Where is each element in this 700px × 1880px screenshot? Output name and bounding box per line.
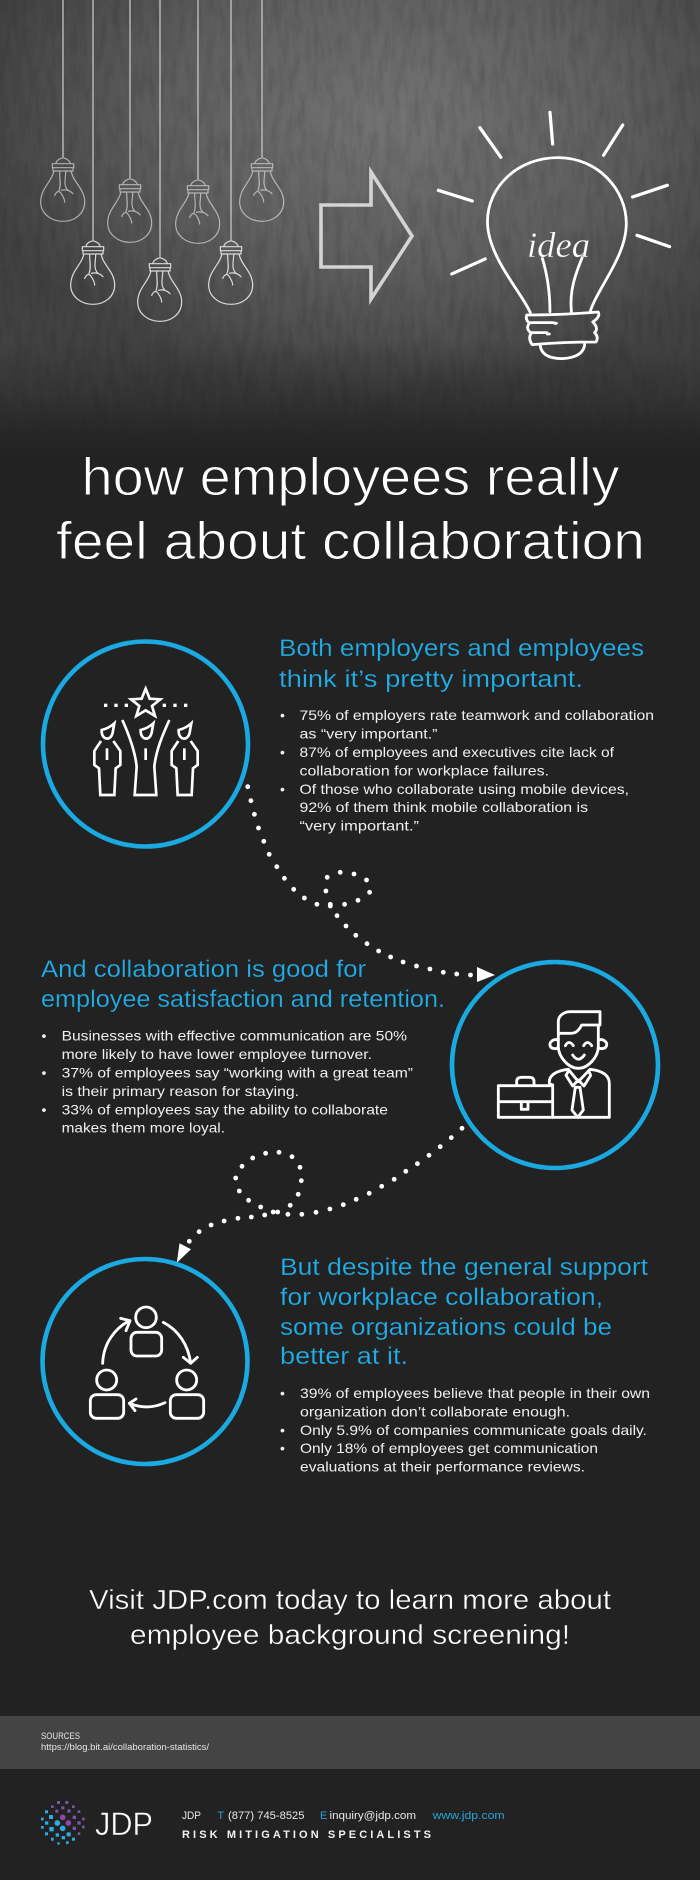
contact line: inquiry@jdp.com: [330, 1810, 416, 1822]
bullets: section 2: •: [42, 1064, 46, 1080]
logo wordmark: JDP: [95, 1806, 153, 1842]
title: how employees really: [82, 448, 620, 507]
bullets: section 2: 33% of employees say the ability to collaborate: [62, 1101, 388, 1117]
bullets: section 3: Only 18% of employees get communication: [300, 1440, 598, 1456]
bullets: section 3: [280, 1385, 650, 1475]
bullets: section 1: Of those who collaborate using mobile devices,: [300, 781, 629, 797]
big idea bulb: [438, 112, 670, 359]
panel: sources band: [0, 1716, 700, 1769]
icon: three people cycle: [90, 1307, 204, 1418]
call to action: Visit JDP.com today to learn more about: [89, 1584, 611, 1615]
heading: section 2: [41, 956, 445, 1013]
panel: sources band: https://blog.bit.ai/collaboration-statistics/: [41, 1742, 209, 1753]
bullets: section 3: Only 5.9% of companies communicate goals daily.: [300, 1422, 647, 1438]
logo: JDP dot burst: [41, 1801, 85, 1845]
bullets: section 2: Businesses with effective communication are 50%: [62, 1028, 407, 1044]
heading: section 2: employee satisfaction and retention.: [41, 986, 445, 1013]
title: [56, 448, 645, 571]
call to action: employee background screening!: [130, 1619, 570, 1650]
bullets: section 1: 75% of employers rate teamwork and collaboration: [300, 707, 654, 723]
bullets: section 3: •: [280, 1385, 285, 1401]
header: chalkboard illustration: [0, 0, 700, 460]
heading: section 3: [280, 1254, 648, 1370]
icon: team with star: [94, 689, 198, 795]
dotted arrow 1: [245, 784, 495, 982]
panel: section 1 text: [279, 635, 654, 834]
heading: section 3: But despite the general support: [280, 1254, 648, 1281]
bullets: section 2: makes them more loyal.: [62, 1120, 225, 1136]
bullets: section 2: [42, 1028, 413, 1136]
panel: section 2 text: [41, 956, 445, 1136]
contact line: JDP: [182, 1810, 201, 1822]
arrow: [321, 172, 412, 299]
bullets: section 3: organization don’t collaborate enough.: [300, 1404, 570, 1420]
panel: section 1 icon circle: [43, 642, 248, 846]
heading: section 2: And collaboration is good for: [41, 956, 366, 983]
title: feel about collaboration: [56, 512, 645, 571]
bullets: section 3: 39% of employees believe that people in their own: [300, 1385, 650, 1401]
heading: section 1: Both employers and employees: [279, 635, 644, 662]
bullets: section 3: •: [280, 1422, 285, 1438]
panel: section 3 text: [280, 1254, 650, 1475]
heading: section 3: for workplace collaboration,: [280, 1284, 603, 1311]
dotted arrow 2: [177, 1126, 464, 1263]
contact line: www.jdp.com: [431, 1810, 505, 1822]
panel: section 2 icon circle: [452, 962, 658, 1168]
heading: section 1: [279, 635, 644, 693]
icon: smiling employee with briefcase: [498, 1012, 609, 1117]
call to action: [89, 1584, 611, 1650]
bullets: section 3: •: [280, 1440, 285, 1456]
bullets: section 1: “very important.”: [300, 818, 419, 834]
big idea bulb: idea: [527, 225, 590, 265]
bullets: section 2: more likely to have lower employee turnover.: [62, 1046, 372, 1062]
bullets: section 1: 87% of employees and executives cite lack of: [300, 744, 614, 760]
contact line: [182, 1810, 505, 1822]
heading: section 3: some organizations could be: [280, 1314, 612, 1341]
heading: section 1: think it’s pretty important.: [279, 666, 583, 693]
hanging bulbs group: [41, 0, 284, 321]
bullets: section 1: •: [280, 744, 285, 760]
bullets: section 1: [280, 707, 654, 834]
bullets: section 2: is their primary reason for staying.: [62, 1083, 299, 1099]
bullets: section 2: 37% of employees say “working with a great team”: [62, 1064, 413, 1080]
contact line: T: [217, 1810, 224, 1822]
contact line: E: [320, 1810, 327, 1822]
bullets: section 1: •: [280, 707, 285, 723]
panel: section 3 icon circle: [42, 1259, 248, 1464]
footer: [41, 1801, 505, 1845]
bullets: section 1: as “very important.”: [300, 726, 438, 742]
panel: sources band: SOURCES: [41, 1731, 80, 1742]
bullets: section 1: 92% of them think mobile collaboration is: [300, 799, 588, 815]
bullets: section 1: collaboration for workplace failures.: [300, 762, 549, 778]
heading: section 3: better at it.: [280, 1343, 408, 1370]
tagline: RISK MITIGATION SPECIALISTS: [182, 1829, 431, 1841]
contact line: (877) 745-8525: [228, 1810, 304, 1822]
bullets: section 1: •: [280, 781, 285, 797]
bullets: section 2: •: [42, 1101, 46, 1117]
bullets: section 3: evaluations at their performance reviews.: [300, 1459, 585, 1475]
bullets: section 2: •: [42, 1028, 46, 1044]
